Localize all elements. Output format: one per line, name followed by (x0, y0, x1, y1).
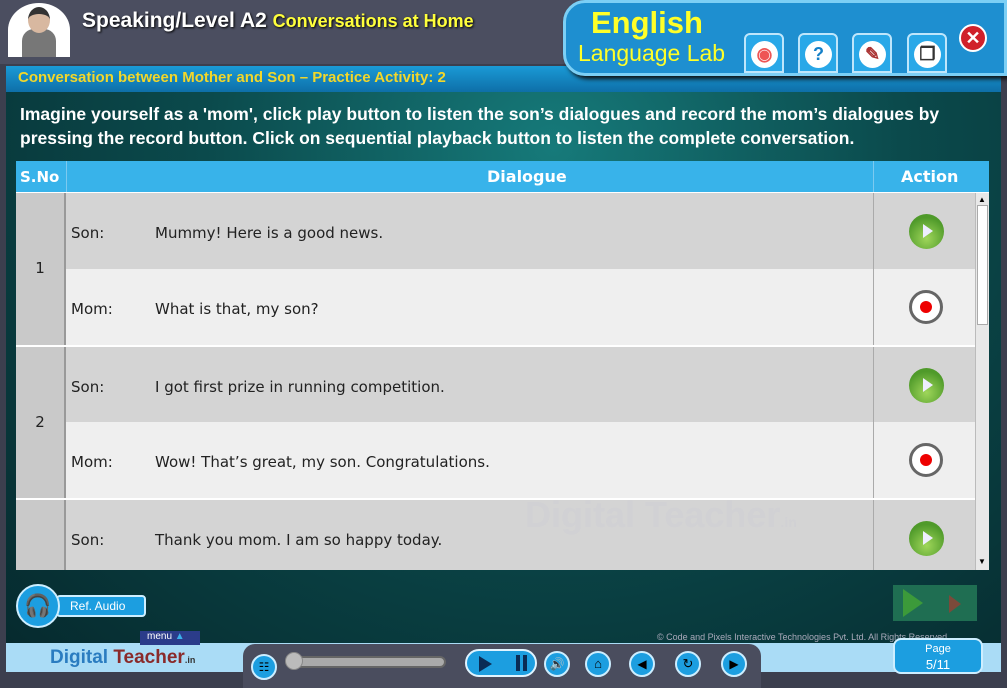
progress slider (288, 656, 446, 668)
icon buttons: ◉ (757, 44, 772, 64)
footer logo: Digital Teacher.in (50, 647, 195, 668)
instructions (20, 104, 939, 148)
icon: close (959, 24, 987, 52)
logo panel: English Language Lab: English (591, 5, 703, 40)
subtitle text: Conversation between Mother and Son – Practice Activity: 2 (18, 69, 446, 86)
text: ▶ (729, 657, 739, 671)
instructions: Imagine yourself as a 'mom', click play button to listen the son’s dialogues and record the mom’s dialogues by (20, 104, 939, 124)
sno cells (16, 193, 66, 345)
text: Son: (71, 378, 104, 396)
page indicator: Page (925, 643, 951, 655)
text: Thank you mom. I am so happy today. (155, 531, 442, 549)
logo panel: English Language Lab: Language Lab (578, 40, 725, 66)
scrollbar (975, 193, 989, 570)
scrollbar: ▼ (978, 557, 986, 566)
text: 2 (35, 413, 45, 431)
title: Speaking/Level A2 Conversations at Home (82, 9, 474, 32)
logo panel: English Language Lab (563, 0, 1007, 76)
text: ⌂ (594, 656, 602, 671)
logo panel: English Language Lab: ❐ (919, 44, 936, 64)
text: ↻ (683, 656, 693, 671)
table header: S.No (20, 168, 59, 186)
table header: Dialogue (487, 167, 567, 186)
media controls bar (243, 644, 761, 688)
subtitle bar (6, 66, 1001, 92)
icon: close: ✕ (965, 28, 981, 48)
bottom bar (6, 643, 1001, 672)
text: What is that, my son? (155, 300, 319, 318)
text: I got first prize in running competition. (155, 378, 445, 396)
dialogue rows: Son: (71, 224, 104, 242)
ref audio button: 🎧 (24, 593, 52, 618)
control icons (251, 654, 277, 680)
instructions: pressing the record button. Click on sequential playback button to listen the complete conversation. (20, 128, 854, 148)
text: Mom: (71, 300, 113, 318)
page indicator (893, 638, 983, 674)
text: Son: (71, 531, 104, 549)
page indicator: 5/11 (926, 657, 950, 672)
icon: avatar (8, 3, 70, 57)
play/pause control (465, 649, 537, 677)
text: 🔊 (550, 657, 564, 671)
control icons: ☷ (259, 660, 269, 674)
copyright: © Code and Pixels Interactive Technologies Pvt. Ltd. All Rights Reserved (657, 632, 947, 642)
text: ◀ (637, 657, 647, 671)
watermark: Digital Teacher.in (525, 494, 797, 535)
menu tab: menu ▲ (147, 631, 185, 642)
ref audio button (16, 584, 146, 628)
menu tab (140, 631, 200, 645)
dialogue rows: Mummy! Here is a good news. (155, 224, 383, 242)
action buttons (873, 193, 975, 269)
text: Mom: (71, 453, 113, 471)
dialogue rows (66, 193, 873, 269)
logo panel: English Language Lab: ✎ (865, 44, 880, 64)
logo panel: English Language Lab: ? (813, 44, 824, 64)
table (16, 161, 989, 570)
sno cells: 1 (35, 259, 45, 277)
main teal background (6, 92, 1001, 645)
sequential playback button (893, 585, 977, 621)
text: Wow! That’s great, my son. Congratulations. (155, 453, 490, 471)
header bar (0, 0, 1007, 64)
scrollbar: ▲ (978, 195, 986, 204)
ref audio button: Ref. Audio (70, 599, 125, 613)
icon buttons (744, 33, 784, 73)
table header (16, 161, 989, 192)
table header: Action (901, 167, 958, 186)
